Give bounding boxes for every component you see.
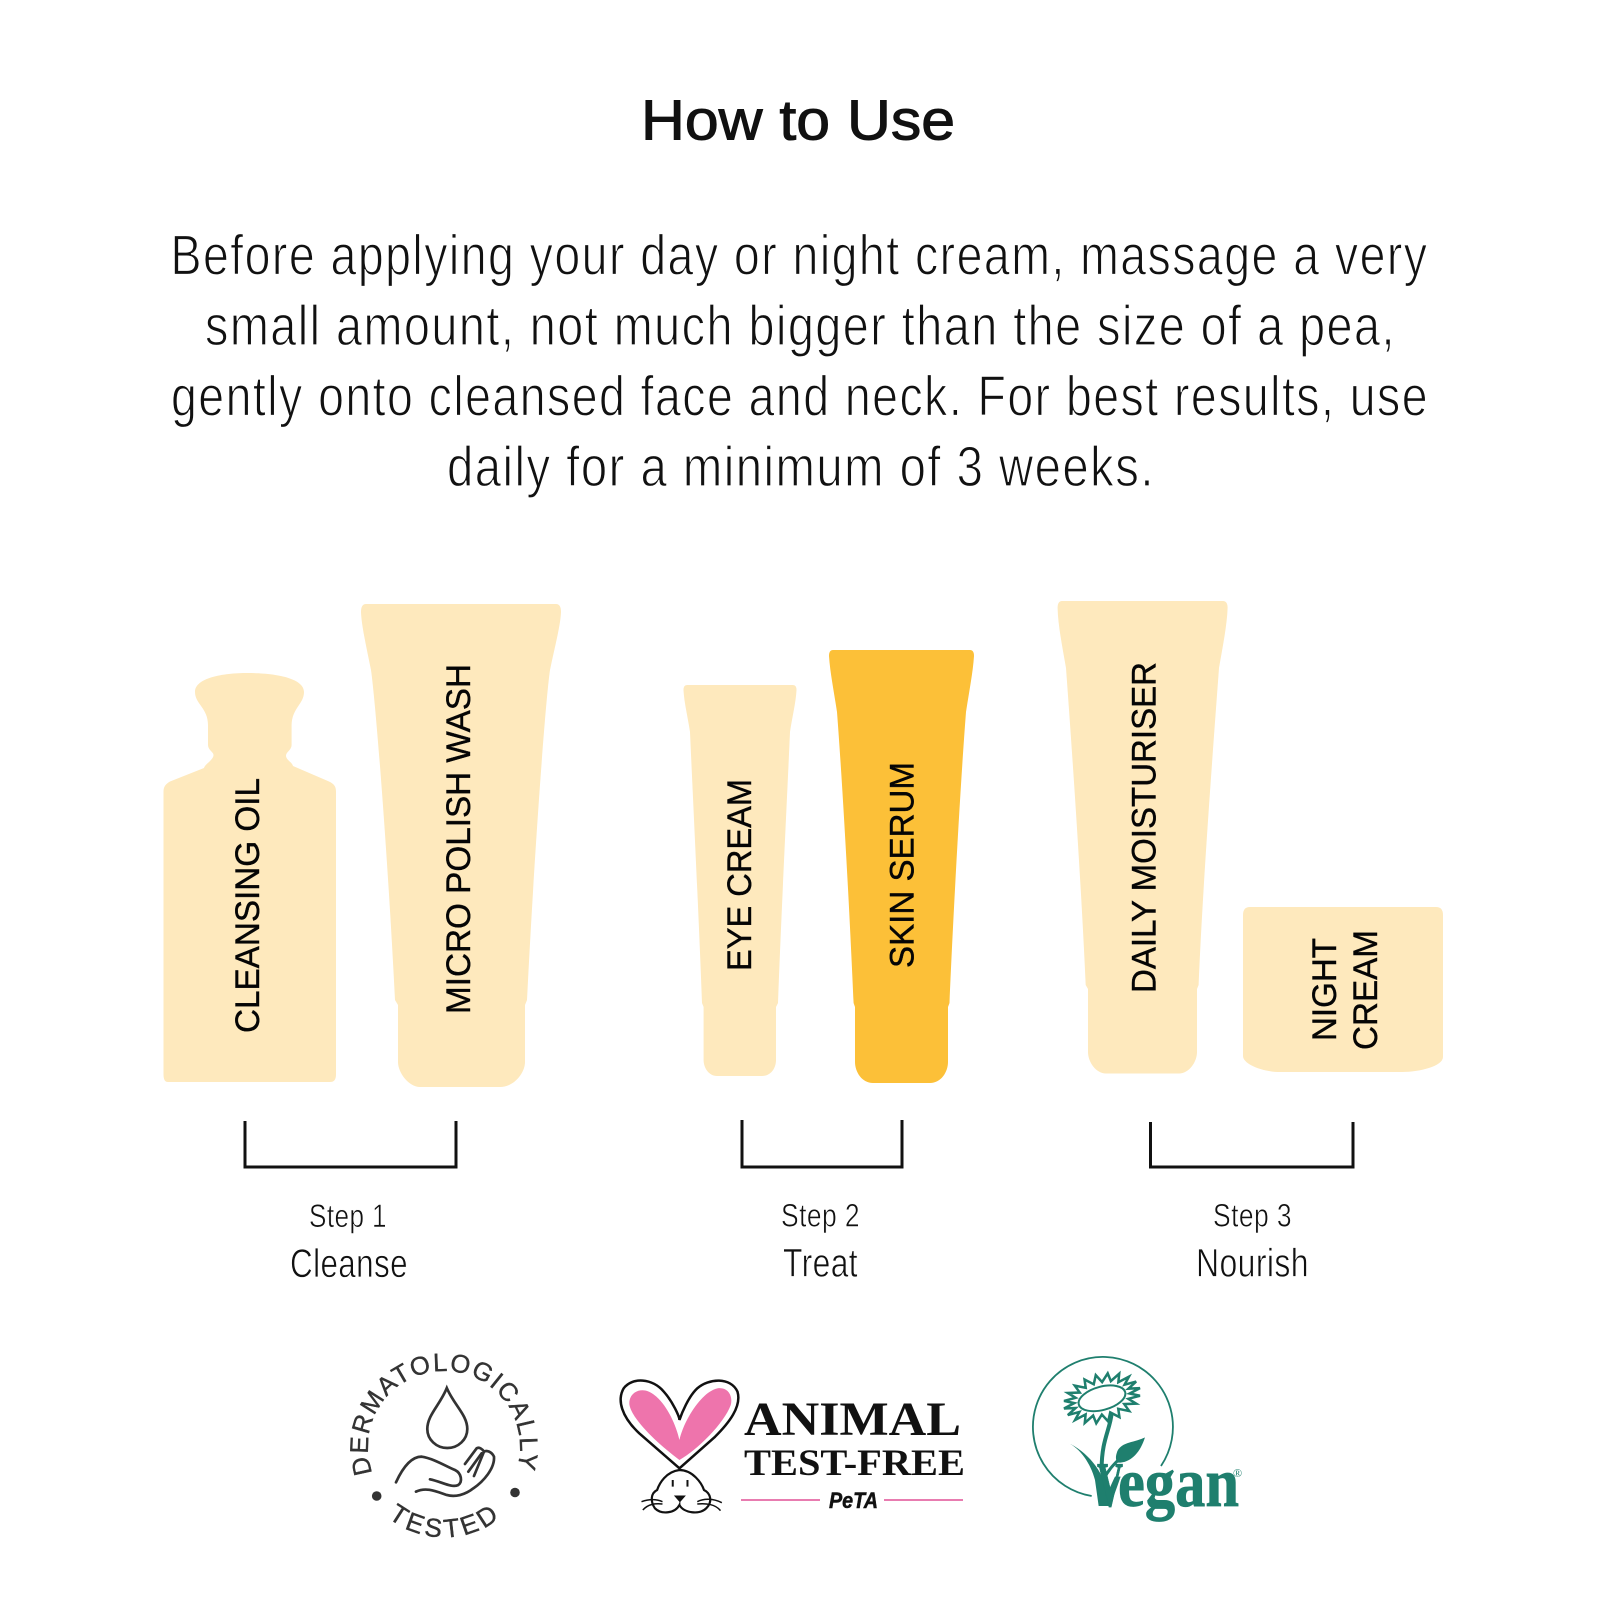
badge: vegan trademark (1033, 1357, 1242, 1522)
step 1 label: Cleanse (290, 1242, 408, 1286)
product: night cream jar (1243, 907, 1443, 1072)
badge: dermatologically tested (350, 1354, 538, 1538)
product: eye cream tube: EYE CREAM (721, 779, 759, 971)
product: skin serum tube (829, 650, 974, 1083)
icon: water drop (427, 1388, 467, 1448)
badge: peta animal test-free (621, 1381, 965, 1513)
icon: sunflower in circle (1033, 1357, 1173, 1506)
step 3 bracket (1150, 1122, 1353, 1167)
step 3 label (1196, 1198, 1309, 1286)
step 1 bracket (245, 1121, 456, 1167)
text: animal test-free (744, 1393, 965, 1484)
step 3 label: Nourish (1196, 1242, 1309, 1286)
product: cleansing oil bottle (164, 673, 336, 1082)
badge: dermatologically tested: DERMATOLOGICALLY (350, 1354, 538, 1476)
product: daily moisturiser tube: DAILY MOISTURISER (1126, 662, 1164, 993)
product: micro polish wash tube (361, 604, 561, 1087)
icon: bunny with heart ears (621, 1381, 738, 1512)
product: cleansing oil bottle: CLEANSING OIL (229, 778, 267, 1033)
text: animal test-free: ANIMAL (744, 1393, 961, 1446)
product: skin serum tube: SKIN SERUM (884, 762, 922, 968)
step 2 label: Treat (783, 1242, 858, 1286)
product: daily moisturiser tube (1058, 601, 1228, 1074)
step 3 label: Step 3 (1213, 1198, 1292, 1234)
product: night cream jar: CREAM (1347, 930, 1385, 1050)
text: vegan: egan (1118, 1445, 1239, 1522)
badge: peta animal test-free: PeTA (829, 1488, 878, 1513)
step 1 label: Step 1 (309, 1198, 387, 1234)
instructions text block (170, 224, 1429, 499)
step 1 label (290, 1198, 408, 1286)
icon: open hand (396, 1448, 494, 1496)
product: eye cream tube (684, 685, 796, 1076)
text: vegan: ® (1233, 1466, 1242, 1480)
text: vegan: V (1097, 1449, 1123, 1520)
title: How to Use (641, 88, 955, 152)
instructions text block: daily for a minimum of 3 weeks. (447, 435, 1155, 499)
product: night cream jar: NIGHT (1306, 938, 1344, 1041)
product: micro polish wash tube: MICRO POLISH WASH (440, 664, 478, 1014)
badge: dermatologically tested: TESTED (393, 1502, 496, 1538)
text: animal test-free: TEST-FREE (744, 1443, 965, 1484)
step 2 bracket (742, 1120, 902, 1167)
step 2 label: Step 2 (781, 1198, 860, 1234)
step 2 label (781, 1198, 860, 1286)
